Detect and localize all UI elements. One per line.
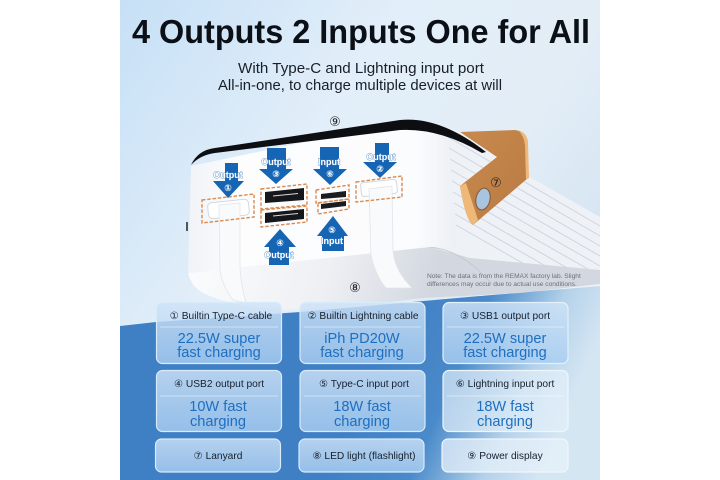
card 1: fast charging <box>177 345 261 361</box>
arrow 5: input: ⑤ <box>328 226 336 236</box>
arrow 6: input: Input <box>318 157 340 167</box>
card 3: ③ USB1 output port <box>460 311 550 322</box>
left cable <box>219 203 246 303</box>
power bank <box>186 120 600 310</box>
seam curve <box>430 247 490 282</box>
card 5: charging <box>334 414 390 430</box>
output slot 2 <box>360 179 398 197</box>
arrow 2: output: Output <box>366 152 396 162</box>
card 2: iPh PD20W <box>324 331 400 347</box>
note: differences may occur due to actual use conditions. <box>427 281 577 288</box>
card 3 <box>443 302 568 364</box>
card 3: 22.5W super <box>464 331 547 347</box>
right cable <box>369 186 412 288</box>
arrow 1: output: ① <box>224 184 232 194</box>
card 6 <box>443 370 568 432</box>
marker 9: ⑨ <box>329 115 341 130</box>
card 4: ④ USB2 output port <box>174 379 264 390</box>
card 6: charging <box>477 414 533 430</box>
arrow 3: output: ③ <box>272 170 280 180</box>
card 2: ② Builtin Lightning cable <box>307 311 419 322</box>
note <box>427 273 581 288</box>
marker 7: ⑦ <box>490 176 502 191</box>
card 4: 10W fast <box>189 399 247 415</box>
dashed highlight boxes <box>202 176 402 227</box>
arrow 4: output <box>264 229 296 265</box>
front face <box>188 121 456 273</box>
card 1 <box>156 302 282 364</box>
card 4: charging <box>190 414 246 430</box>
black display band <box>191 120 486 165</box>
ribbed side <box>430 122 600 296</box>
arrow 2: output: ② <box>376 165 384 175</box>
card 2 <box>300 302 425 364</box>
output slot 1 <box>207 199 250 219</box>
background <box>120 0 600 480</box>
arrow 4: output: Output <box>264 250 294 260</box>
lanyard <box>460 130 529 225</box>
arrow 6: input <box>313 147 347 185</box>
USB ports <box>265 188 304 223</box>
title: 4 Outputs 2 Inputs One for All <box>132 13 590 50</box>
card 6: 18W fast <box>476 399 534 415</box>
arrow 5: input <box>317 216 348 251</box>
card 5: 18W fast <box>333 399 391 415</box>
Type-C and Lightning ports <box>321 191 346 209</box>
card 8 <box>299 439 424 472</box>
card 9 <box>442 439 568 472</box>
subtitle: With Type-C and Lightning input port <box>238 60 485 77</box>
arrow 3: output <box>259 148 293 184</box>
card 1: ① Builtin Type-C cable <box>170 311 273 322</box>
underside <box>188 247 600 310</box>
card 4 <box>156 370 282 432</box>
arrow 5: input: Input <box>321 236 343 246</box>
card 7 <box>156 439 280 472</box>
card 5 <box>300 370 425 432</box>
note: Note: The data is from the REMAX factory lab. Slight <box>427 273 581 280</box>
marker 8: ⑧ <box>349 281 361 296</box>
subtitle line 2: All-in-one, to charge multiple devices at will <box>218 77 502 94</box>
card 9: ⑨ Power display <box>467 451 544 462</box>
arrow 1: output <box>213 163 244 198</box>
arrow 4: output: ④ <box>276 239 284 249</box>
card 2: fast charging <box>320 345 404 361</box>
card 7: ⑦ Lanyard <box>194 451 243 462</box>
arrow 1: output: Output <box>213 170 243 180</box>
card 6: ⑥ Lightning input port <box>456 379 554 390</box>
card 3: fast charging <box>463 345 547 361</box>
arrow 2: output <box>363 143 397 178</box>
arrow 6: input: ⑥ <box>326 170 334 180</box>
card 8: ⑧ LED light (flashlight) <box>312 451 416 462</box>
card 5: ⑤ Type-C input port <box>319 379 409 390</box>
card 1: 22.5W super <box>178 331 261 347</box>
left side notch <box>186 222 188 231</box>
arrow 3: output: Output <box>261 157 291 167</box>
